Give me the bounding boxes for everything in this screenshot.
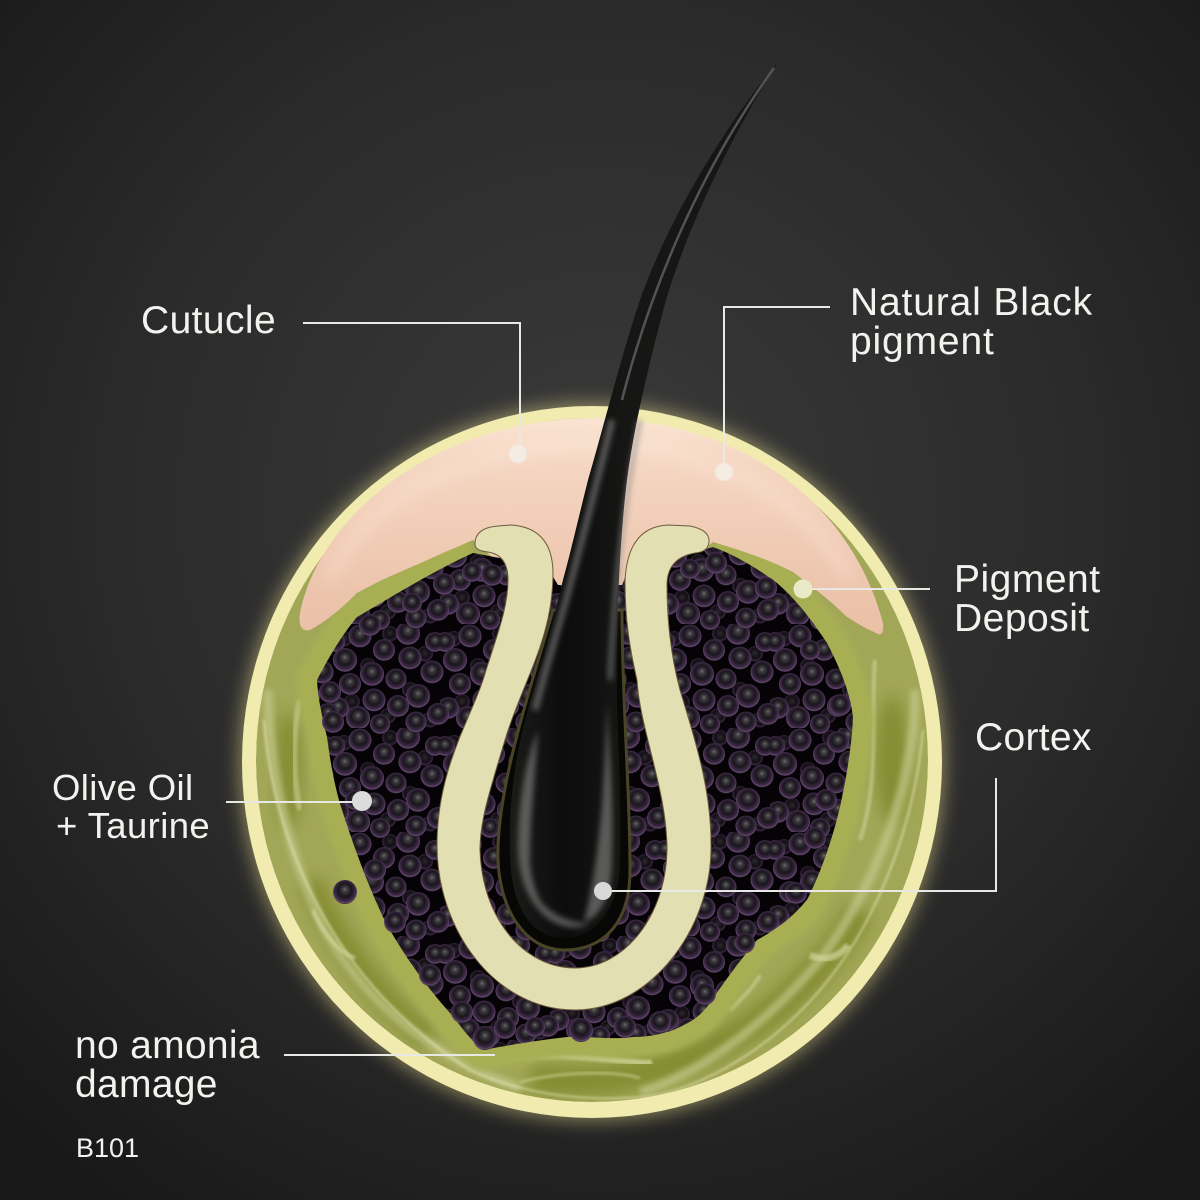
dark halo around bulb: [498, 610, 630, 950]
follicle sheath: [437, 525, 711, 1010]
leader: Olive Oil + Taurine: [226, 791, 372, 811]
pink cuticle crescent: [299, 418, 883, 634]
label: Natural Black pigment: Natural Black: [850, 281, 1093, 324]
cross-section diagram: [239, 62, 945, 1121]
hair strand: [510, 62, 778, 938]
pigment beads: [317, 547, 853, 1050]
label: Cortex: Cortex: [975, 716, 1092, 759]
shaft left shine: [535, 420, 612, 710]
leader: Natural Black pigment: [715, 307, 830, 481]
label: Olive Oil + Taurine: + Taurine: [56, 805, 210, 846]
label: Cutucle: Cutucle: [141, 299, 276, 342]
label: no amonia damage: damage: [75, 1063, 218, 1106]
shaft right shine: [610, 420, 640, 680]
label: Pigment Deposit: Pigment: [954, 558, 1101, 601]
leader: Cortex: [594, 778, 996, 900]
lighter band next to beads: [298, 696, 874, 1072]
edge beads: [319, 552, 851, 1050]
loose bead: [333, 880, 357, 904]
label: Pigment Deposit: Deposit: [954, 597, 1090, 640]
outer glow: [239, 403, 945, 1121]
leader: Cutucle: [303, 323, 527, 463]
label: no amonia damage: no amonia: [75, 1024, 260, 1067]
green oil layer: [256, 418, 928, 1102]
leader: no amonia damage: [284, 1054, 495, 1056]
shaft upper shine: [622, 68, 774, 400]
label: B101: B101: [76, 1133, 139, 1163]
label: Olive Oil + Taurine: Olive Oil: [52, 767, 194, 808]
leader: Pigment Deposit: [794, 580, 930, 598]
label: Natural Black pigment: pigment: [850, 320, 995, 363]
cream outer rim: [242, 406, 942, 1118]
bulb left shine: [518, 730, 590, 928]
hair shaft and bulb: [498, 62, 778, 950]
cuticle highlight: [330, 445, 850, 580]
bulb right shine: [584, 700, 613, 922]
